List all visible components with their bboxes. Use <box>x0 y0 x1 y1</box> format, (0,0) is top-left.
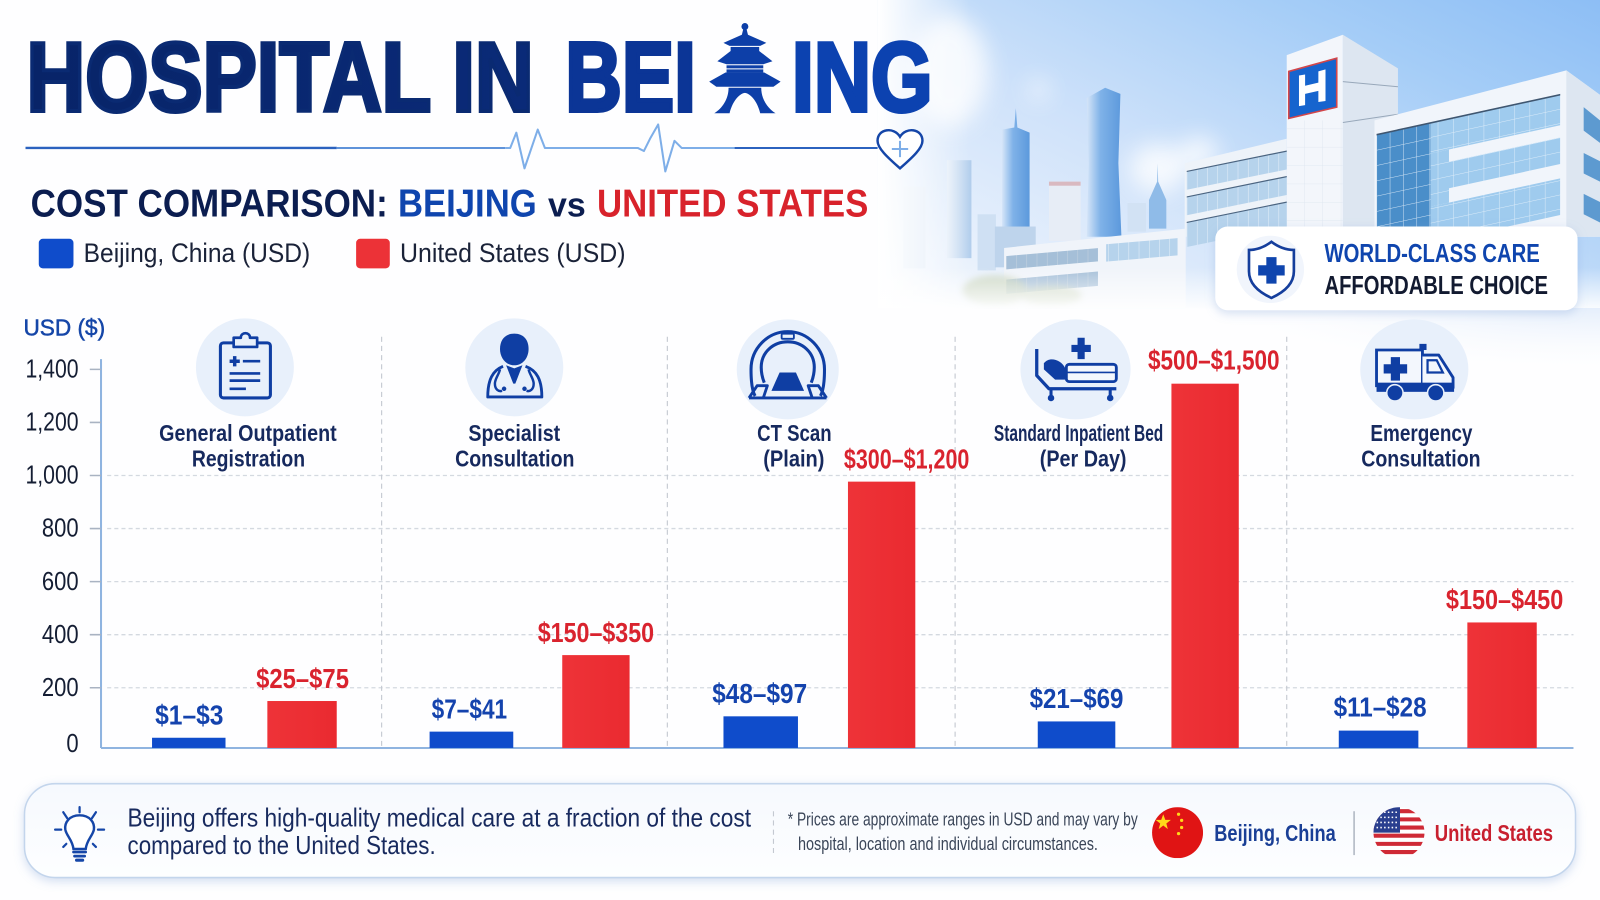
panel: footer takeaway <box>24 784 1576 878</box>
hero image: Beijing skyline and hospital building <box>878 0 1600 308</box>
icon: US flag <box>1373 807 1424 858</box>
category: standard inpatient bed: (Per Day) <box>1040 445 1127 471</box>
trees <box>962 276 1082 306</box>
legend: Beijing: Beijing, China (USD) <box>84 238 310 268</box>
label: CT Scan <box>757 420 832 446</box>
callout text: WORLD-CLASS CARE <box>1324 240 1540 268</box>
legend: United States: United States (USD) <box>400 238 626 268</box>
y axis labels: 800 <box>42 515 79 543</box>
y axis labels: 400 <box>42 621 79 649</box>
title: BEI <box>565 22 696 132</box>
category: specialist consultation <box>455 318 574 471</box>
icon: Temple of Heaven replacing J <box>709 23 781 113</box>
label: Emergency <box>1370 420 1473 446</box>
title <box>27 22 933 132</box>
icon: shield with cross <box>1249 242 1294 298</box>
subtitle words: COST COMPARISON: <box>31 182 388 225</box>
bars: general outpatient registration: $1–$3 <box>155 699 223 730</box>
icon: CT scanner <box>737 319 839 419</box>
flag label: United States: United States <box>1435 820 1553 846</box>
clouds <box>910 15 1217 193</box>
subtitle: BEIJING <box>398 182 537 225</box>
panel: footer takeaway: hospital, location and individual circumstances. <box>798 833 1098 854</box>
low front building <box>1004 228 1186 292</box>
bars: general outpatient registration <box>152 663 349 748</box>
icon: doctor with stethoscope <box>465 318 563 416</box>
bars: standard inpatient bed: $21–$69 <box>1030 683 1123 714</box>
left fade <box>878 0 956 286</box>
bars: standard inpatient bed <box>1030 344 1280 748</box>
y axis and ticks <box>90 359 1573 748</box>
panel: footer takeaway: compared to the United States. <box>128 832 436 860</box>
category: emergency consultation <box>1360 319 1481 471</box>
bars: specialist consultation: $150–$350 <box>538 617 654 648</box>
label: Specialist <box>468 420 561 446</box>
bars: emergency consultation: $11–$28 <box>1334 691 1427 722</box>
bars: emergency consultation: $150–$450 <box>1446 584 1563 615</box>
icon: China flag <box>1152 807 1203 858</box>
title words: HOSPITAL IN <box>27 22 534 132</box>
y axis title: USD ($) <box>23 315 105 341</box>
bars: general outpatient registration: $25–$75 <box>256 663 349 694</box>
category: specialist consultation: Consultation <box>455 445 574 471</box>
label: General Outpatient <box>159 420 337 446</box>
icon: clipboard <box>196 318 294 416</box>
bottom fade <box>938 272 1600 308</box>
bars: CT scan <box>712 443 969 748</box>
subtitle <box>31 182 868 225</box>
y axis labels <box>26 356 79 758</box>
hospital tower <box>1287 35 1398 237</box>
disclaimer note: * Prices are approximate ranges in USD and may vary by <box>788 809 1138 830</box>
sky <box>878 0 1600 308</box>
bars: specialist consultation: $7–$41 <box>432 693 507 724</box>
category: standard inpatient bed <box>994 319 1163 471</box>
category: CT scan: (Plain) <box>763 445 824 471</box>
left hospital wing <box>1185 139 1287 247</box>
subtitle: vs <box>548 186 586 224</box>
category: general outpatient registration: Registration <box>192 445 305 471</box>
category: emergency consultation: Consultation <box>1361 445 1481 471</box>
y axis labels: 1,200 <box>26 409 79 437</box>
bars: CT scan: $48–$97 <box>712 678 807 709</box>
legend <box>39 238 626 268</box>
far skyline towers <box>950 88 1166 270</box>
icon: light bulb <box>55 807 104 860</box>
hospital H sign <box>1289 58 1337 118</box>
bar chart <box>23 315 1573 758</box>
gridlines <box>107 337 1573 748</box>
icon: heart with cross <box>878 130 922 168</box>
y axis labels: 600 <box>42 568 79 596</box>
subtitle: UNITED STATES <box>597 182 868 225</box>
flag label: Beijing: Beijing, China <box>1214 820 1336 846</box>
y axis labels: 200 <box>42 674 79 702</box>
bars: specialist consultation <box>430 617 654 748</box>
y axis labels: 1,000 <box>26 462 79 490</box>
y axis labels: 1,400 <box>26 356 79 384</box>
category: CT scan <box>737 319 839 471</box>
icon: ambulance <box>1360 319 1468 419</box>
category: general outpatient registration <box>159 318 337 471</box>
callout: world-class care <box>1215 227 1578 310</box>
right hospital wing with glass <box>1374 70 1600 255</box>
title: ING <box>792 22 933 132</box>
label: Standard Inpatient Bed <box>994 420 1163 446</box>
bars: CT scan: $300–$1,200 <box>844 443 969 474</box>
icon: hospital bed <box>1020 319 1131 419</box>
y axis labels: 0 <box>66 730 79 758</box>
pale wash below hero <box>1173 302 1600 376</box>
takeaway text: Beijing offers high-quality medical care at a fraction of the cost <box>128 805 751 833</box>
bars: emergency consultation <box>1334 584 1563 748</box>
ECG heartbeat line <box>26 124 922 171</box>
bars: standard inpatient bed: $500–$1,500 <box>1148 344 1280 375</box>
callout: world-class care: AFFORDABLE CHOICE <box>1324 272 1548 300</box>
